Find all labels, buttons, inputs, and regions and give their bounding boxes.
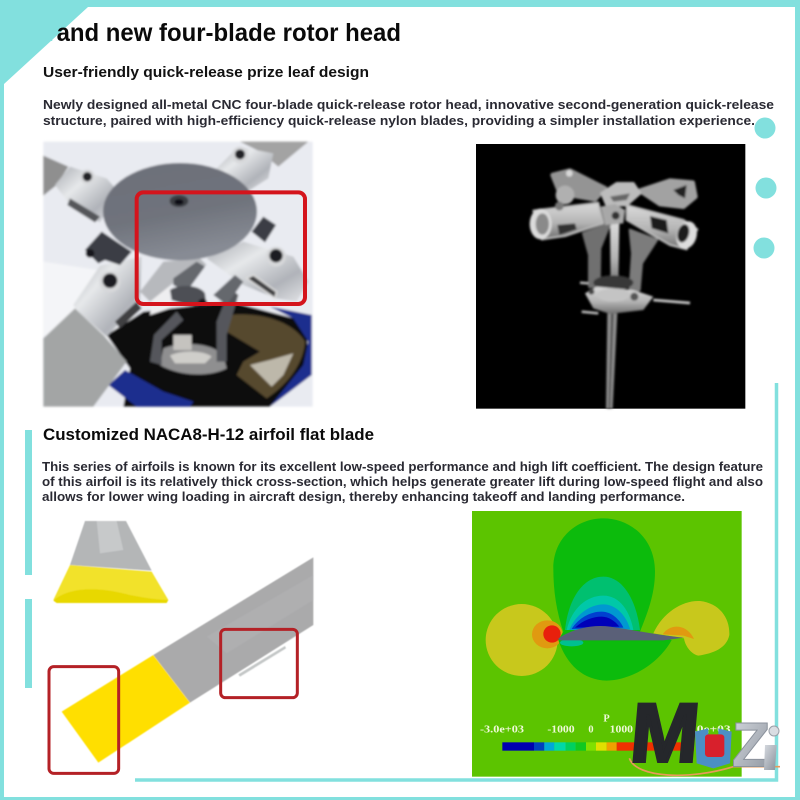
colour scale bbox=[502, 742, 694, 751]
paragraph: airfoil description bbox=[42, 460, 763, 504]
paragraph: rotor head description: structure, paired with high-efficiency quick-release nylon blades, providing a simpler installation experience. bbox=[43, 114, 755, 128]
heading: airfoil flat blade: Customized NACA8-H-12 airfoil flat blade bbox=[43, 426, 374, 444]
red highlight box: blade tip bbox=[49, 667, 119, 773]
chart: airfoil pressure contour bbox=[472, 511, 742, 777]
colour scale labels: 1000 bbox=[610, 725, 633, 736]
colour scale labels: 2.0e+03 bbox=[687, 725, 731, 736]
colour scale labels: P bbox=[603, 714, 610, 725]
logo: MuZi watermark: Z bbox=[732, 711, 770, 781]
inner corner line bbox=[135, 383, 776, 780]
subheading: quick release design: User-friendly quick-release prize leaf design bbox=[43, 64, 369, 81]
logo: MuZi watermark: M bbox=[627, 686, 704, 780]
colour scale labels: -3.0e+03 bbox=[480, 725, 524, 736]
red highlight box: blade edge bbox=[221, 629, 297, 698]
colour scale labels: 0 bbox=[588, 725, 594, 736]
paragraph: airfoil description: of this airfoil is its relatively thick cross-section, which helps generate greater lift during low-speed flight and also bbox=[42, 475, 763, 489]
decorative dots bbox=[754, 118, 776, 258]
paragraph: rotor head description: Newly designed all-metal CNC four-blade quick-release rotor head, innovative second-generation quick-release bbox=[43, 98, 774, 112]
left accent bars bbox=[25, 430, 32, 688]
logo: MuZi watermark bbox=[627, 686, 780, 781]
paragraph: airfoil description: allows for lower wing loading in aircraft design, thereby enhancing takeoff and landing performance. bbox=[42, 490, 685, 504]
photo: rotor head on black background bbox=[476, 144, 745, 409]
paragraph: airfoil description: This series of airfoils is known for its excellent low-speed performance and high lift coefficient. The design feature bbox=[42, 460, 763, 474]
photo: blade end cross-section bbox=[53, 521, 168, 603]
heading: brand new rotor head: Brand new four-blade rotor head bbox=[30, 19, 401, 47]
paragraph: rotor head description bbox=[43, 98, 774, 128]
photo: long blade with red highlights bbox=[49, 557, 313, 773]
red highlight box bbox=[137, 192, 305, 304]
colour scale labels bbox=[480, 714, 731, 736]
pressure contours bbox=[486, 518, 729, 681]
logo letter u bbox=[695, 728, 732, 768]
colour scale labels: -1000 bbox=[547, 725, 575, 736]
photo: rotor head close-up with red highlight bbox=[43, 142, 313, 407]
